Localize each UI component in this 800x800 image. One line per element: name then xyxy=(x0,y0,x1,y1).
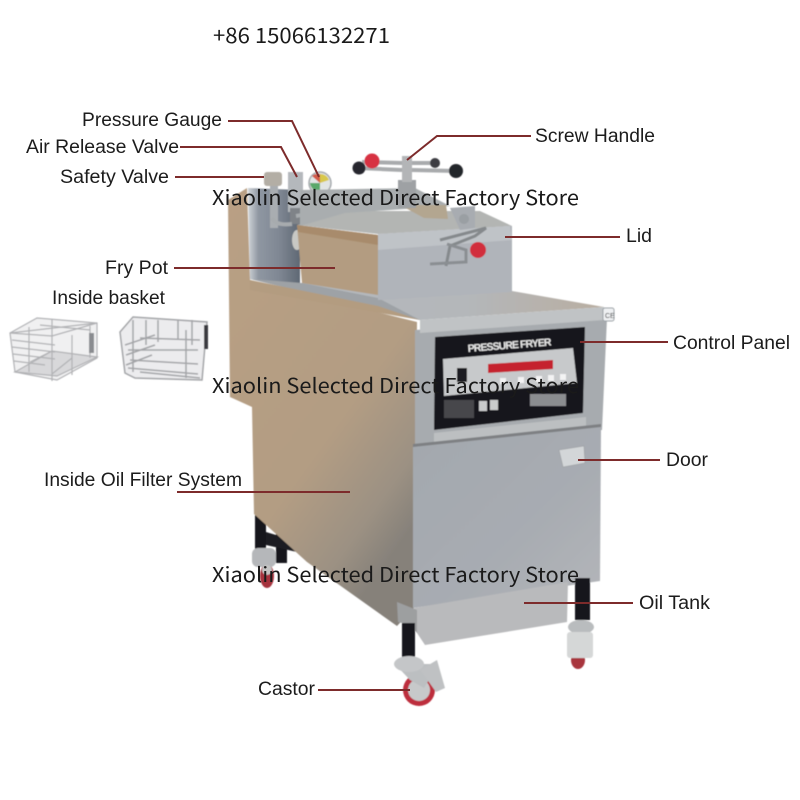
label: Oil Tank: Oil Tank xyxy=(639,593,711,614)
watermark middle: Xiaolin Selected Direct Factory Store xyxy=(212,369,579,399)
label: Fry Pot: Fry Pot xyxy=(105,258,169,279)
front top strip xyxy=(420,307,604,333)
leader: Screw Handle xyxy=(407,136,531,160)
cabinet top shelf xyxy=(300,283,604,320)
label: Pressure Gauge: Pressure Gauge xyxy=(82,110,222,131)
pressure gauge xyxy=(309,172,331,194)
label: Door: Door xyxy=(666,450,709,471)
fry pot tan side xyxy=(297,225,378,295)
oil tank xyxy=(414,582,568,645)
label: Screw Handle: Screw Handle xyxy=(535,126,655,147)
screw handle xyxy=(352,154,463,208)
phone number: +86 15066132271 xyxy=(213,20,390,50)
CE mark: CE xyxy=(605,313,615,320)
label: Control Panel: Control Panel xyxy=(673,333,790,354)
control panel xyxy=(434,327,585,430)
control panel housing xyxy=(415,318,607,447)
rear left leg and castor xyxy=(252,505,306,588)
inside basket heading: Inside basket xyxy=(52,288,166,309)
watermark top: Xiaolin Selected Direct Factory Store xyxy=(212,181,579,211)
front left leg and castor xyxy=(394,602,445,706)
control panel: PRESSURE FRYER xyxy=(467,336,552,355)
door xyxy=(413,426,601,608)
side panel tan xyxy=(228,188,417,626)
leader: Air Release Valve xyxy=(180,147,297,177)
leader: Safety Valve xyxy=(175,176,264,178)
lid front xyxy=(378,226,512,300)
leader: Lid xyxy=(505,236,620,238)
lid top xyxy=(297,211,512,234)
CE mark xyxy=(603,308,615,321)
leader: Inside Oil Filter System xyxy=(177,491,350,493)
icon: right fry basket xyxy=(120,317,208,380)
leader: Oil Tank xyxy=(524,602,633,604)
leader: Fry Pot xyxy=(174,267,335,269)
label: Lid: Lid xyxy=(626,226,652,247)
front right leg and castor xyxy=(567,578,594,669)
valve group xyxy=(264,172,310,250)
label: Inside Oil Filter System: Inside Oil Filter System xyxy=(44,470,242,491)
leader: Control Panel xyxy=(580,341,668,343)
label: Safety Valve: Safety Valve xyxy=(60,167,169,188)
label: Air Release Valve: Air Release Valve xyxy=(26,137,179,158)
leader: Door xyxy=(578,459,660,461)
lid latch xyxy=(430,206,486,266)
leader: Pressure Gauge xyxy=(228,121,319,177)
watermark bottom: Xiaolin Selected Direct Factory Store xyxy=(212,558,579,588)
leader: Castor xyxy=(318,689,410,691)
pressure fryer machine xyxy=(228,154,615,706)
label: Castor: Castor xyxy=(258,679,316,700)
rear steel splash panel xyxy=(248,188,300,285)
icon: left fry basket xyxy=(10,318,97,381)
door handle xyxy=(559,446,585,467)
